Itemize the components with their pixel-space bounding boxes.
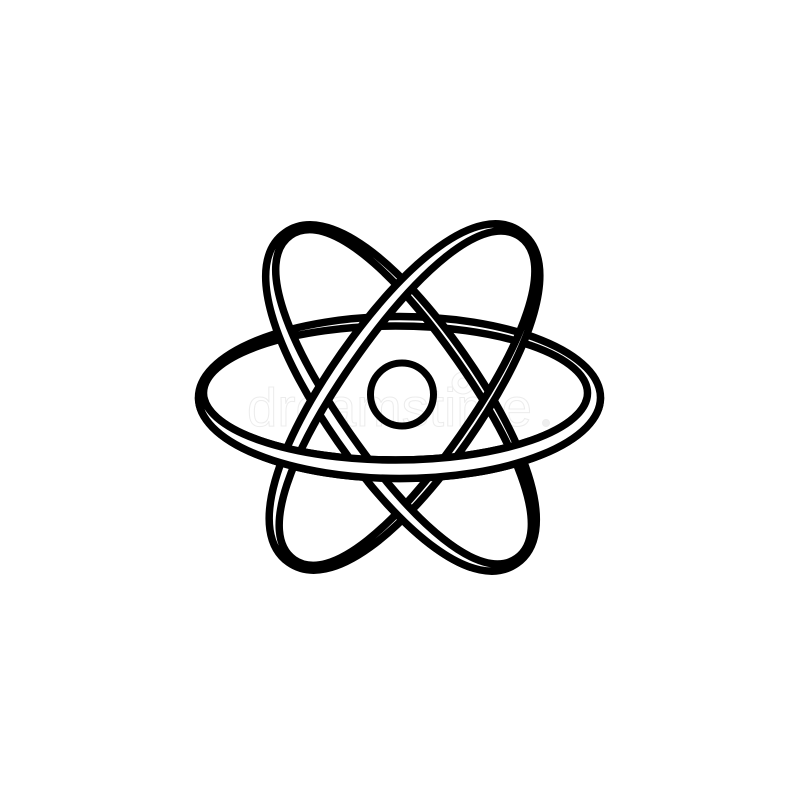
orbit: tilted ring from upper left to lower right — [222, 188, 580, 608]
orbit: tilted ring from upper right to lower left — [226, 187, 583, 607]
nucleus — [370, 363, 434, 426]
orbit weave: upper-left ring passing over at the bottom crossing — [364, 484, 470, 572]
orbit: horizontal ring, back portion — [198, 316, 600, 478]
orbit: horizontal ring, front portion — [194, 398, 604, 482]
atom icon illustration — [194, 220, 604, 575]
watermark: dreamstime — [247, 378, 532, 438]
